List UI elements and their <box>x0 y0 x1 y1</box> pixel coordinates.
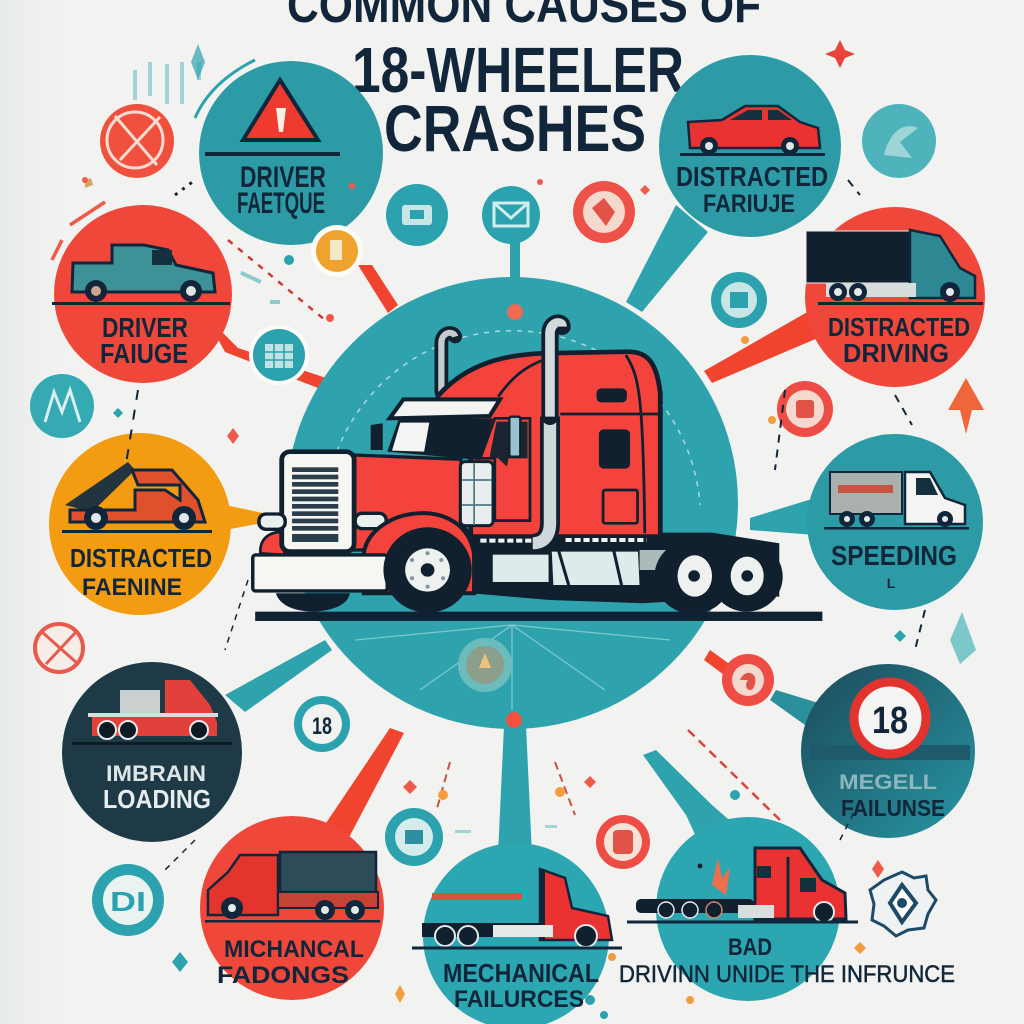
badge: driver fatigue, teal circle with warning sign: FAETQUE <box>237 187 325 220</box>
badge: distracted driving, red circle with black box truck <box>805 207 985 387</box>
badge: driver fatigue, red circle with teal truck: DRIVER <box>102 312 188 343</box>
title: 18-WHEELER <box>352 34 684 106</box>
badge: mechanical failures, teal circle with flatbed truck <box>412 843 622 1024</box>
title: CRASHES <box>384 91 646 165</box>
badge: speeding, teal circle with silver truck <box>807 434 983 610</box>
icon: red badge bottom <box>596 815 650 869</box>
badge: distracted famine, orange circle with dump truck <box>49 433 231 615</box>
icon: teal star badge left <box>30 374 94 438</box>
icon: teal badge bottom <box>385 808 443 866</box>
badge: speeding, teal circle with silver truck: SPEEDING <box>831 540 957 571</box>
badge: mechanical fadongs, red circle with dump truck <box>200 816 384 1000</box>
badge: driver fatigue, red circle with teal truck: FAIUGE <box>100 338 188 369</box>
badge: mechanical failure, dark teal circle with speed sign 18: 18 <box>872 700 908 742</box>
title <box>287 0 761 165</box>
badge: distracted top right, teal circle with red car <box>659 55 841 237</box>
icon: teal document badge <box>386 184 448 246</box>
badge: speeding, teal circle with silver truck: L <box>887 575 896 591</box>
icon: pale teal badge top right <box>862 104 936 178</box>
central teal disc <box>286 277 738 729</box>
icon: teal calendar badge <box>249 325 309 385</box>
badge: imbrain loading, dark circle with flatbed truck: IMBRAIN <box>106 761 206 786</box>
icon: teal badge lower left <box>92 864 164 936</box>
icon: red crossed circle <box>100 104 174 178</box>
badge: bad driving under the influence, teal circle with flatbed truck: DRIVINN UNIDE THE INFRUNCE <box>619 961 955 988</box>
badge: driver fatigue, teal circle with warning sign: DRIVER <box>240 161 326 194</box>
badge: mechanical failures, teal circle with flatbed truck: FAILURCES <box>454 986 584 1013</box>
icon: teal 18 badge: 18 <box>312 713 332 740</box>
badge: driver fatigue, red circle with teal truck <box>52 205 232 383</box>
icon: teal badge lower left: DI <box>110 886 146 917</box>
badge: mechanical fadongs, red circle with dump truck: MICHANCAL <box>224 936 364 963</box>
badge: distracted driving, red circle with black box truck: DRIVING <box>843 338 949 368</box>
badge: mechanical fadongs, red circle with dump truck: FADONGS <box>217 962 349 989</box>
icon: navy gear <box>870 872 936 936</box>
icon: orange badge <box>311 225 363 277</box>
icon: red prohibited sign <box>35 624 83 672</box>
badge: distracted famine, orange circle with dump truck: DISTRACTED <box>70 543 212 573</box>
icon: teal drop <box>950 612 976 664</box>
central red semi truck <box>253 323 822 621</box>
connectors <box>205 205 832 862</box>
icon: red badge top <box>573 181 635 243</box>
badge: bad driving under the influence, teal circle with flatbed truck: BAD <box>728 934 772 961</box>
badge: distracted famine, orange circle with dump truck: FAENINE <box>82 574 182 601</box>
icon: teal envelope badge <box>482 186 540 244</box>
badge: distracted driving, red circle with black box truck: DISTRACTED <box>828 312 970 342</box>
icon: red badge right <box>777 381 833 437</box>
icon: teal badge right <box>711 272 767 328</box>
badge: mechanical failures, teal circle with flatbed truck: MECHANICAL <box>443 958 599 988</box>
icon: teal 18 badge <box>294 696 350 752</box>
badge: driver fatigue, teal circle with warning sign <box>199 61 383 245</box>
badge: mechanical failure, dark teal circle with speed sign 18 <box>801 664 975 838</box>
badge: imbrain loading, dark circle with flatbed truck <box>62 662 242 842</box>
badge: mechanical failure, dark teal circle with speed sign 18: MEGELL <box>839 771 937 794</box>
badge: imbrain loading, dark circle with flatbed truck: LOADING <box>103 784 211 814</box>
badge: distracted top right, teal circle with red car: FARIUJE <box>703 190 795 218</box>
badge: bad driving under the influence, teal circle with flatbed truck <box>619 817 955 1001</box>
icon: red badge lower right <box>722 654 774 706</box>
icon: orange arrow <box>948 378 984 434</box>
badge: distracted top right, teal circle with red car: DISTRACTED <box>676 161 828 192</box>
badge: mechanical failure, dark teal circle with speed sign 18: FAILUNSE <box>841 795 945 821</box>
